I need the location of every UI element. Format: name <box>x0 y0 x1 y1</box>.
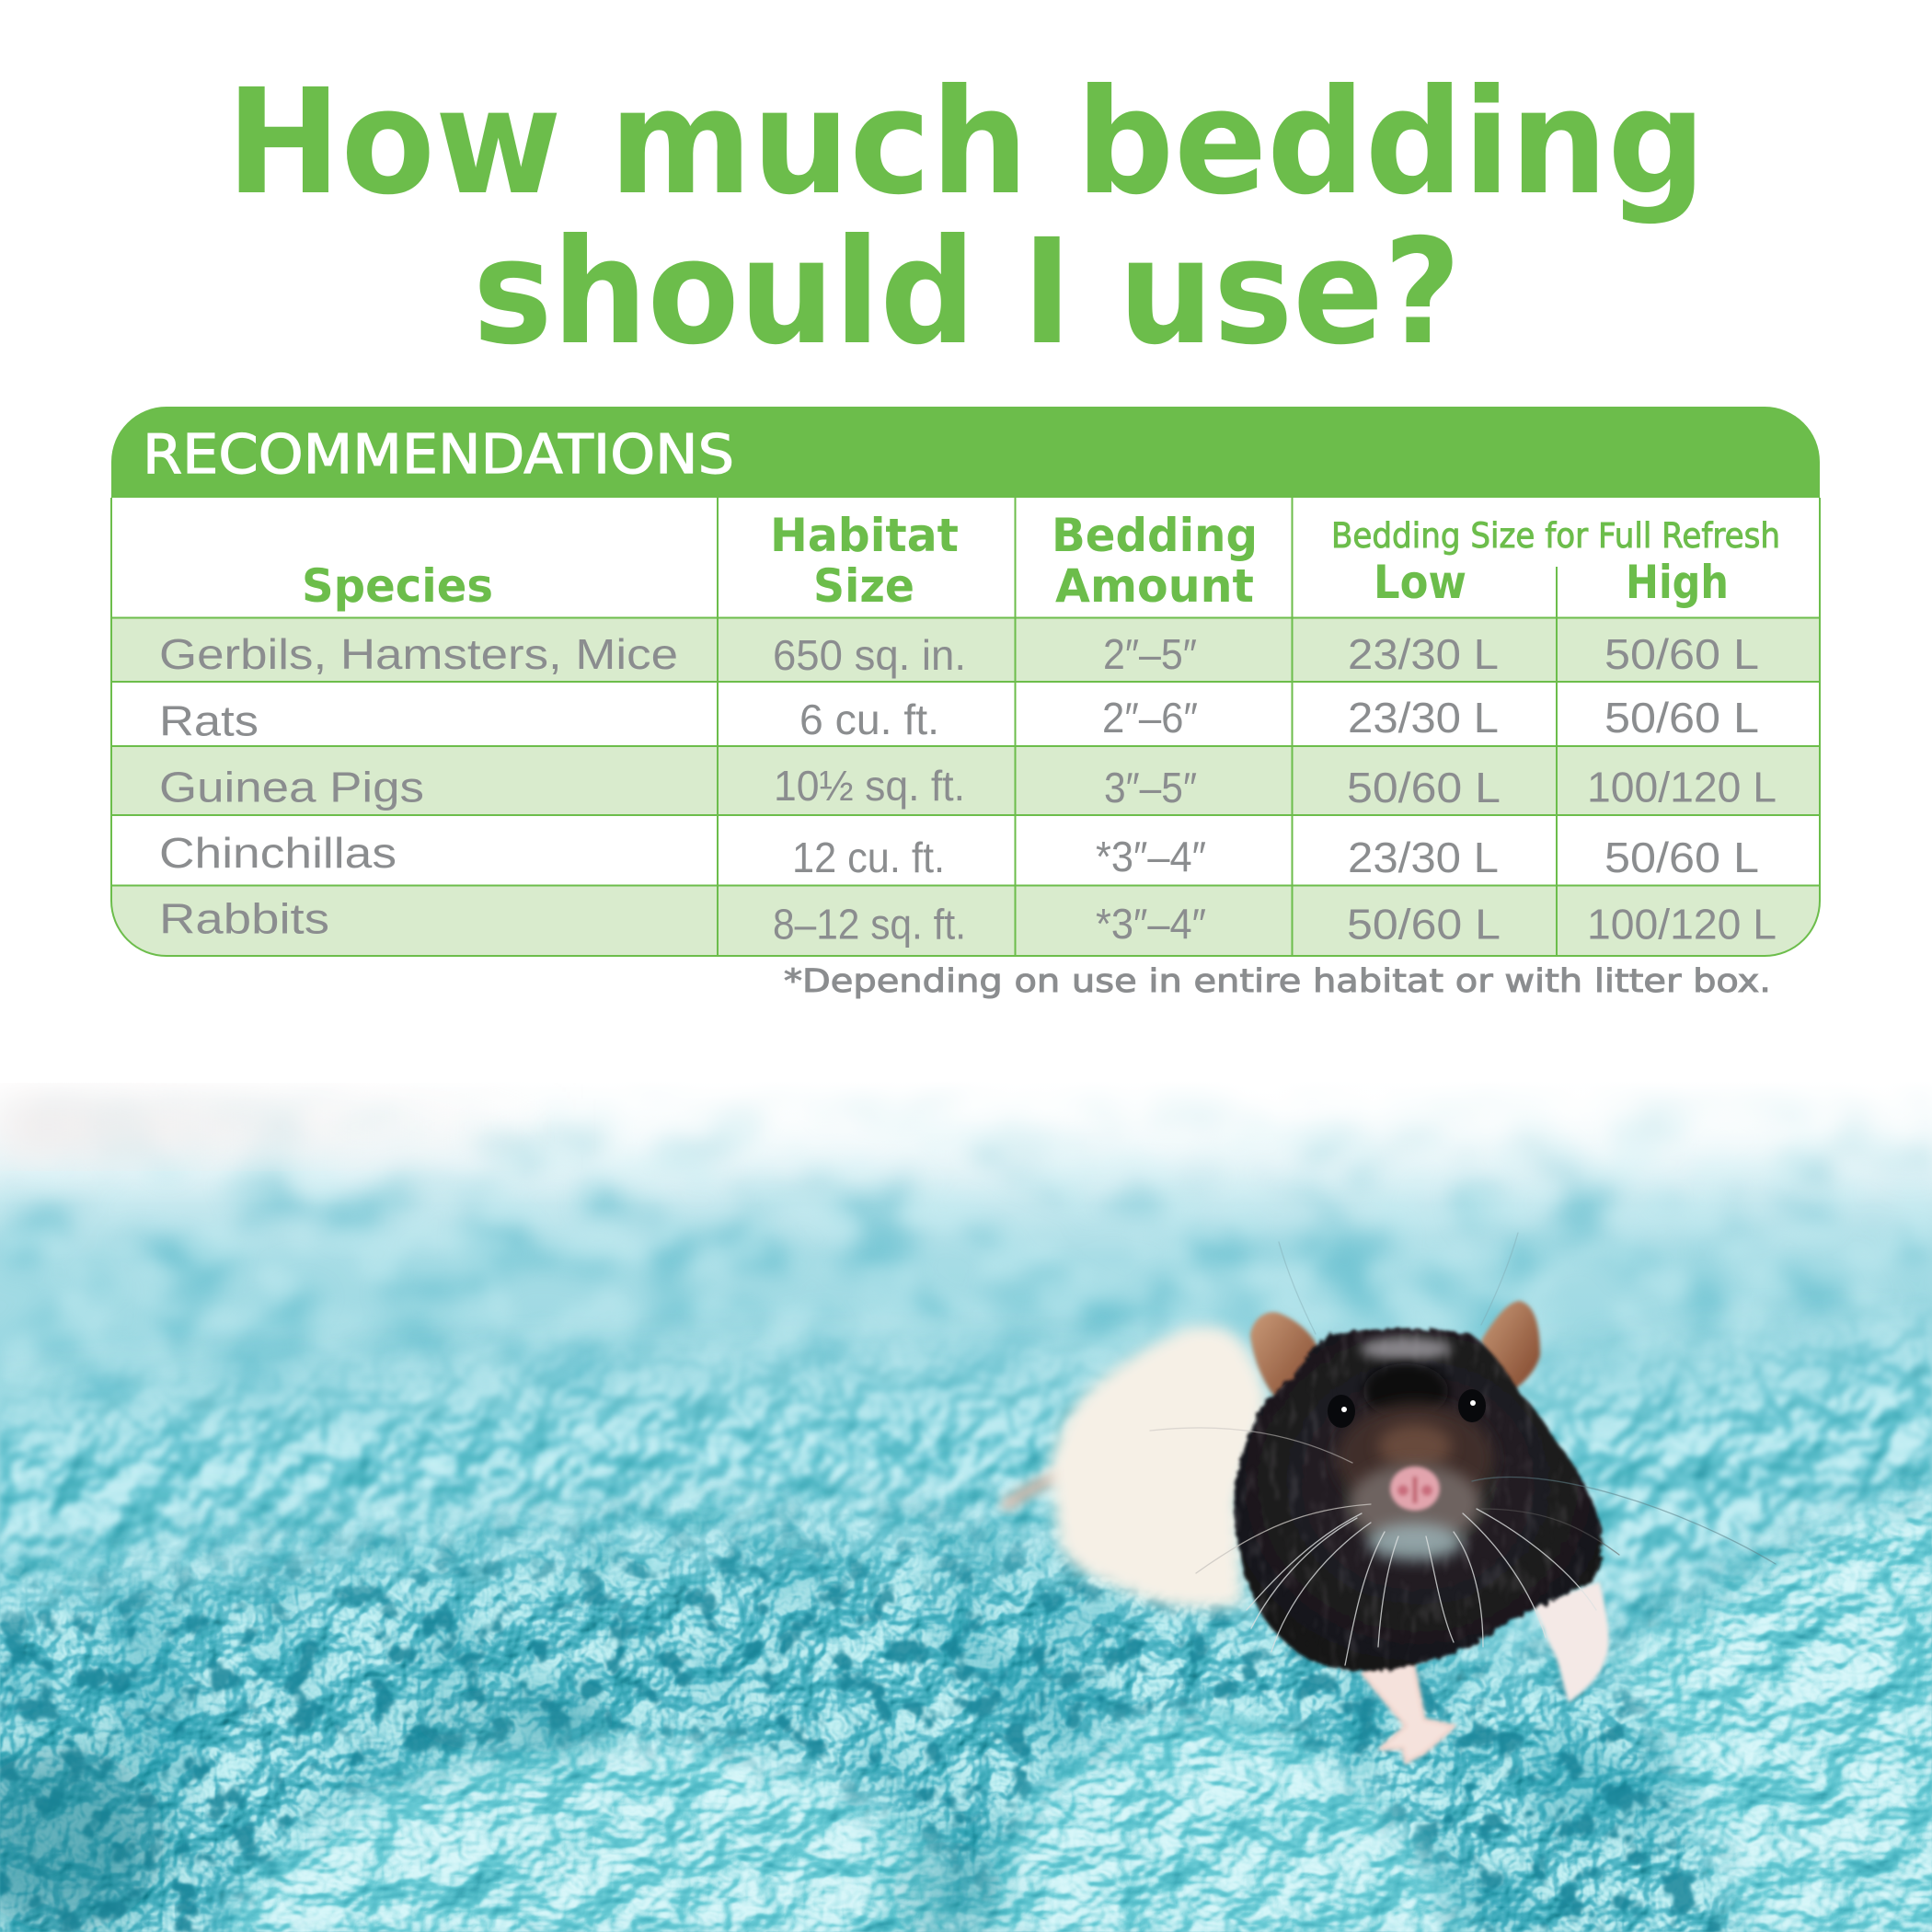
nose <box>1390 1466 1440 1511</box>
photo: blue paper bedding <box>0 1040 1932 1932</box>
left ear <box>1250 1312 1318 1404</box>
footnote: *Depending on use in entire habitat or with litter box. <box>784 963 1771 1000</box>
species column: Gerbils, Hamsters, Mice <box>159 630 678 678</box>
species column: Rabbits <box>159 894 329 942</box>
column headers <box>302 509 1729 613</box>
right ear <box>1481 1301 1540 1391</box>
bedding amount column <box>1096 630 1206 948</box>
high size column: 50/60 L <box>1604 694 1759 742</box>
habitat size column: 12 cu. ft. <box>792 834 945 881</box>
bedding amount column: 2″–5″ <box>1103 630 1197 678</box>
whiskers <box>1150 1233 1776 1665</box>
species column: Guinea Pigs <box>159 764 424 811</box>
high size column: 100/120 L <box>1587 900 1777 948</box>
bedding amount column: 3″–5″ <box>1104 764 1197 811</box>
high size column: 50/60 L <box>1604 630 1759 678</box>
high size column: 100/120 L <box>1587 764 1777 811</box>
low size column: 50/60 L <box>1347 764 1501 811</box>
bedding amount column: *3″–4″ <box>1096 833 1206 880</box>
eyes <box>1328 1389 1486 1428</box>
species column: Chinchillas <box>159 829 397 877</box>
low size column: 23/30 L <box>1348 630 1499 678</box>
panel: recommendations table <box>111 407 1820 956</box>
column headers: Bedding <box>1052 509 1258 562</box>
white rat body <box>1007 1327 1270 1609</box>
column headers: Habitat <box>770 509 959 562</box>
face details <box>1336 1337 1494 1560</box>
right rear leg <box>1534 1581 1609 1703</box>
habitat size column: 10½ sq. ft. <box>774 762 965 810</box>
species column <box>159 630 678 942</box>
table banner <box>111 407 1820 498</box>
habitat size column: 8–12 sq. ft. <box>773 900 966 948</box>
title: How much bedding <box>226 58 1706 227</box>
title: should I use? <box>473 208 1461 377</box>
column headers: High <box>1626 556 1729 609</box>
header: bedding size for full refresh: Bedding Size for Full Refresh <box>1331 516 1780 556</box>
column headers: Species <box>302 559 493 613</box>
banner heading: RECOMMENDATIONS <box>143 422 734 486</box>
low size column: 23/30 L <box>1348 694 1499 742</box>
high size column: 50/60 L <box>1604 834 1759 881</box>
habitat size column <box>773 631 966 948</box>
front paw <box>1363 1648 1455 1763</box>
high size column <box>1587 630 1777 948</box>
species column: Rats <box>159 697 259 745</box>
bedding amount column: *3″–4″ <box>1096 900 1206 948</box>
low size column <box>1347 630 1501 948</box>
column headers: Amount <box>1055 559 1254 613</box>
illustration: rats <box>1007 1233 1776 1763</box>
low size column: 50/60 L <box>1347 900 1501 948</box>
fur mottling <box>1235 1329 1601 1667</box>
bedding amount column: 2″–6″ <box>1102 694 1198 742</box>
column headers: Size <box>813 559 914 613</box>
column headers: Low <box>1374 556 1466 609</box>
title <box>226 58 1706 377</box>
habitat size column: 6 cu. ft. <box>799 696 939 743</box>
black rat body <box>1234 1328 1603 1671</box>
shaded rows <box>111 618 1820 956</box>
habitat size column: 650 sq. in. <box>773 631 966 679</box>
low size column: 23/30 L <box>1348 834 1499 881</box>
